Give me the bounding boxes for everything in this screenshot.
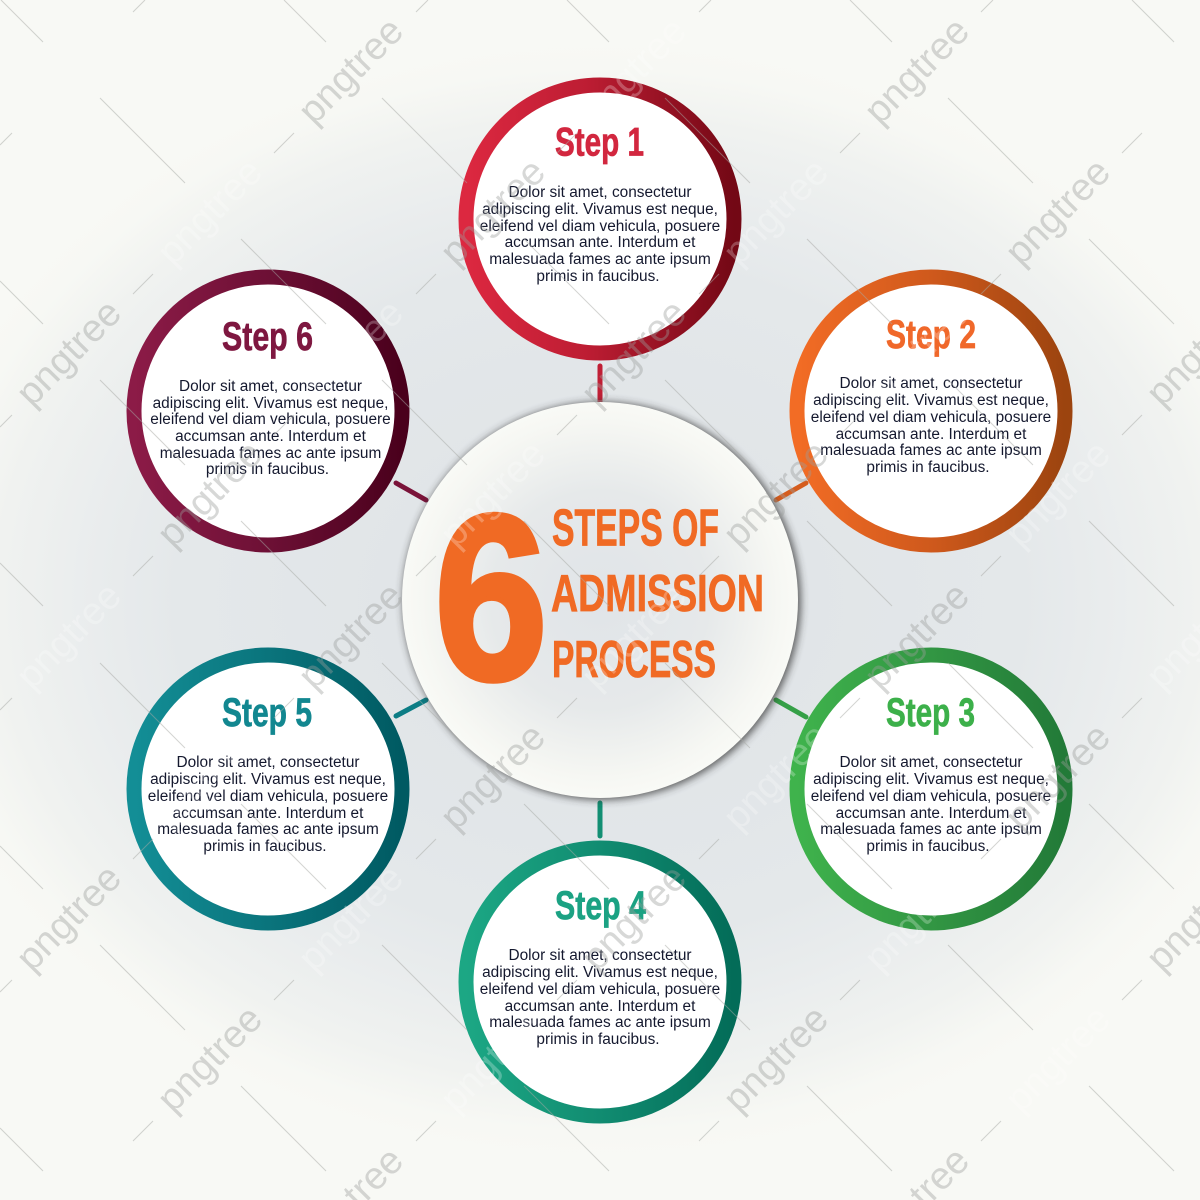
panel: step 1 <box>466 85 734 353</box>
panel: step 3: adipiscing elit. Vivamus est neque, <box>813 771 1049 788</box>
panel: step 6: Step 6 <box>222 315 313 359</box>
watermark text, white: pngtree <box>8 574 130 697</box>
hub title: 6 steps of admission process: ADMISSION <box>551 565 764 623</box>
panel: step 2: accumsan ante. Interdum et <box>836 426 1027 443</box>
watermark text, white: pngtree <box>856 291 978 414</box>
watermark text, white: pngtree <box>715 150 837 273</box>
connectors between hub and steps <box>396 366 806 836</box>
watermark text, gray: pngtree <box>856 9 978 132</box>
central hub circle <box>402 402 801 800</box>
panel: step 1: Dolor sit amet, consectetur <box>508 184 692 201</box>
watermark text, white: pngtree <box>149 715 271 838</box>
panel: step 6: Dolor sit amet, consectetur <box>179 378 362 395</box>
watermark text, gray: pngtree <box>290 9 412 132</box>
panel: step 5: eleifend vel diam vehicula, posuere <box>148 788 388 805</box>
watermark text, gray: pngtree <box>149 432 271 555</box>
watermark text, gray: pngtree <box>715 997 837 1120</box>
watermark text, white: pngtree <box>432 432 554 555</box>
panel: step 1: primis in faucibus. <box>536 268 660 285</box>
panel: step 5: adipiscing elit. Vivamus est neque, <box>150 771 386 788</box>
panel: step 6: primis in faucibus. <box>206 461 329 478</box>
watermark text, gray: pngtree <box>997 150 1119 273</box>
panel: step 1: adipiscing elit. Vivamus est neque, <box>482 201 718 218</box>
hub title: 6 steps of admission process: STEPS OF <box>552 500 719 558</box>
watermark text, gray: pngtree <box>573 291 695 414</box>
watermark text, gray: pngtree <box>573 856 695 979</box>
watermark text, white: pngtree <box>290 291 412 414</box>
panel: step 1: eleifend vel diam vehicula, posuere <box>480 218 720 235</box>
panel: step 2: Step 2 <box>886 313 976 357</box>
watermark text, white: pngtree <box>997 997 1119 1120</box>
panel: step 2: malesuada fames ac ante ipsum <box>820 442 1042 459</box>
watermark text, gray: pngtree <box>715 432 837 555</box>
panel: step 3: primis in faucibus. <box>866 838 990 855</box>
panel: step 1: accumsan ante. Interdum et <box>505 234 696 251</box>
watermark text, white: pngtree <box>432 997 554 1120</box>
panel: step 3: Dolor sit amet, consectetur <box>839 754 1023 771</box>
panel: step 4 <box>466 848 734 1116</box>
watermark text, gray: pngtree <box>856 574 978 697</box>
panel: step 5: primis in faucibus. <box>203 838 327 855</box>
panel: step 2: Dolor sit amet, consectetur <box>839 375 1023 392</box>
panel: step 4: Dolor sit amet, consectetur <box>508 947 692 964</box>
panel: step 6: malesuada fames ac ante ipsum <box>160 445 381 462</box>
watermark text, white: pngtree <box>856 856 978 979</box>
panel: step 4: adipiscing elit. Vivamus est neque, <box>482 964 718 981</box>
panel: step 2: primis in faucibus. <box>866 459 990 476</box>
panel: step 3: accumsan ante. Interdum et <box>836 805 1027 822</box>
panel: step 3: malesuada fames ac ante ipsum <box>820 821 1042 838</box>
watermark text, white: pngtree <box>149 150 271 273</box>
watermark text, gray: pngtree <box>432 150 554 273</box>
watermark text, white: pngtree <box>573 574 695 697</box>
panel: step 6: adipiscing elit. Vivamus est neque, <box>153 395 388 412</box>
panel: step 1: malesuada fames ac ante ipsum <box>489 251 711 268</box>
hub title: 6 steps of admission process: PROCESS <box>552 631 716 689</box>
panel: step 6: eleifend vel diam vehicula, posuere <box>150 411 391 428</box>
panel: step 6: accumsan ante. Interdum et <box>175 428 367 445</box>
panel: step 4: accumsan ante. Interdum et <box>505 998 696 1015</box>
panel: step 1: Step 1 <box>555 120 644 164</box>
hub title: 6 steps of admission process: 6 <box>434 466 548 730</box>
watermark text, gray: pngtree <box>8 291 130 414</box>
panel: step 4: primis in faucibus. <box>536 1031 660 1048</box>
panel: step 6 <box>134 277 402 545</box>
panel: step 5: Dolor sit amet, consectetur <box>176 754 360 771</box>
panel: step 2: eleifend vel diam vehicula, posuere <box>811 409 1051 426</box>
hub title: 6 steps of admission process <box>434 466 764 730</box>
watermark text, gray: pngtree <box>8 856 130 979</box>
watermark text, white: pngtree <box>997 432 1119 555</box>
panel: step 5: malesuada fames ac ante ipsum <box>157 821 379 838</box>
watermark text, gray: pngtree <box>997 715 1119 838</box>
panel: step 3: eleifend vel diam vehicula, posuere <box>811 788 1051 805</box>
panel: step 2: adipiscing elit. Vivamus est neque, <box>813 392 1049 409</box>
watermark text, gray: pngtree <box>290 574 412 697</box>
watermark text, white: pngtree <box>715 715 837 838</box>
panel: step 2 <box>797 277 1065 545</box>
panel: step 3 <box>797 655 1065 923</box>
watermark text, gray: pngtree <box>149 997 271 1120</box>
panel: step 3: Step 3 <box>886 691 975 735</box>
watermark text, white: pngtree <box>290 856 412 979</box>
panel: step 4: malesuada fames ac ante ipsum <box>489 1014 711 1031</box>
panel: step 4: eleifend vel diam vehicula, posuere <box>480 981 720 998</box>
watermark text, white: pngtree <box>573 9 695 132</box>
panel: step 5 <box>134 655 402 923</box>
watermark text, gray: pngtree <box>432 715 554 838</box>
panel: step 4: Step 4 <box>555 884 647 928</box>
panel: step 5: accumsan ante. Interdum et <box>173 805 364 822</box>
panel: step 5: Step 5 <box>222 691 312 735</box>
